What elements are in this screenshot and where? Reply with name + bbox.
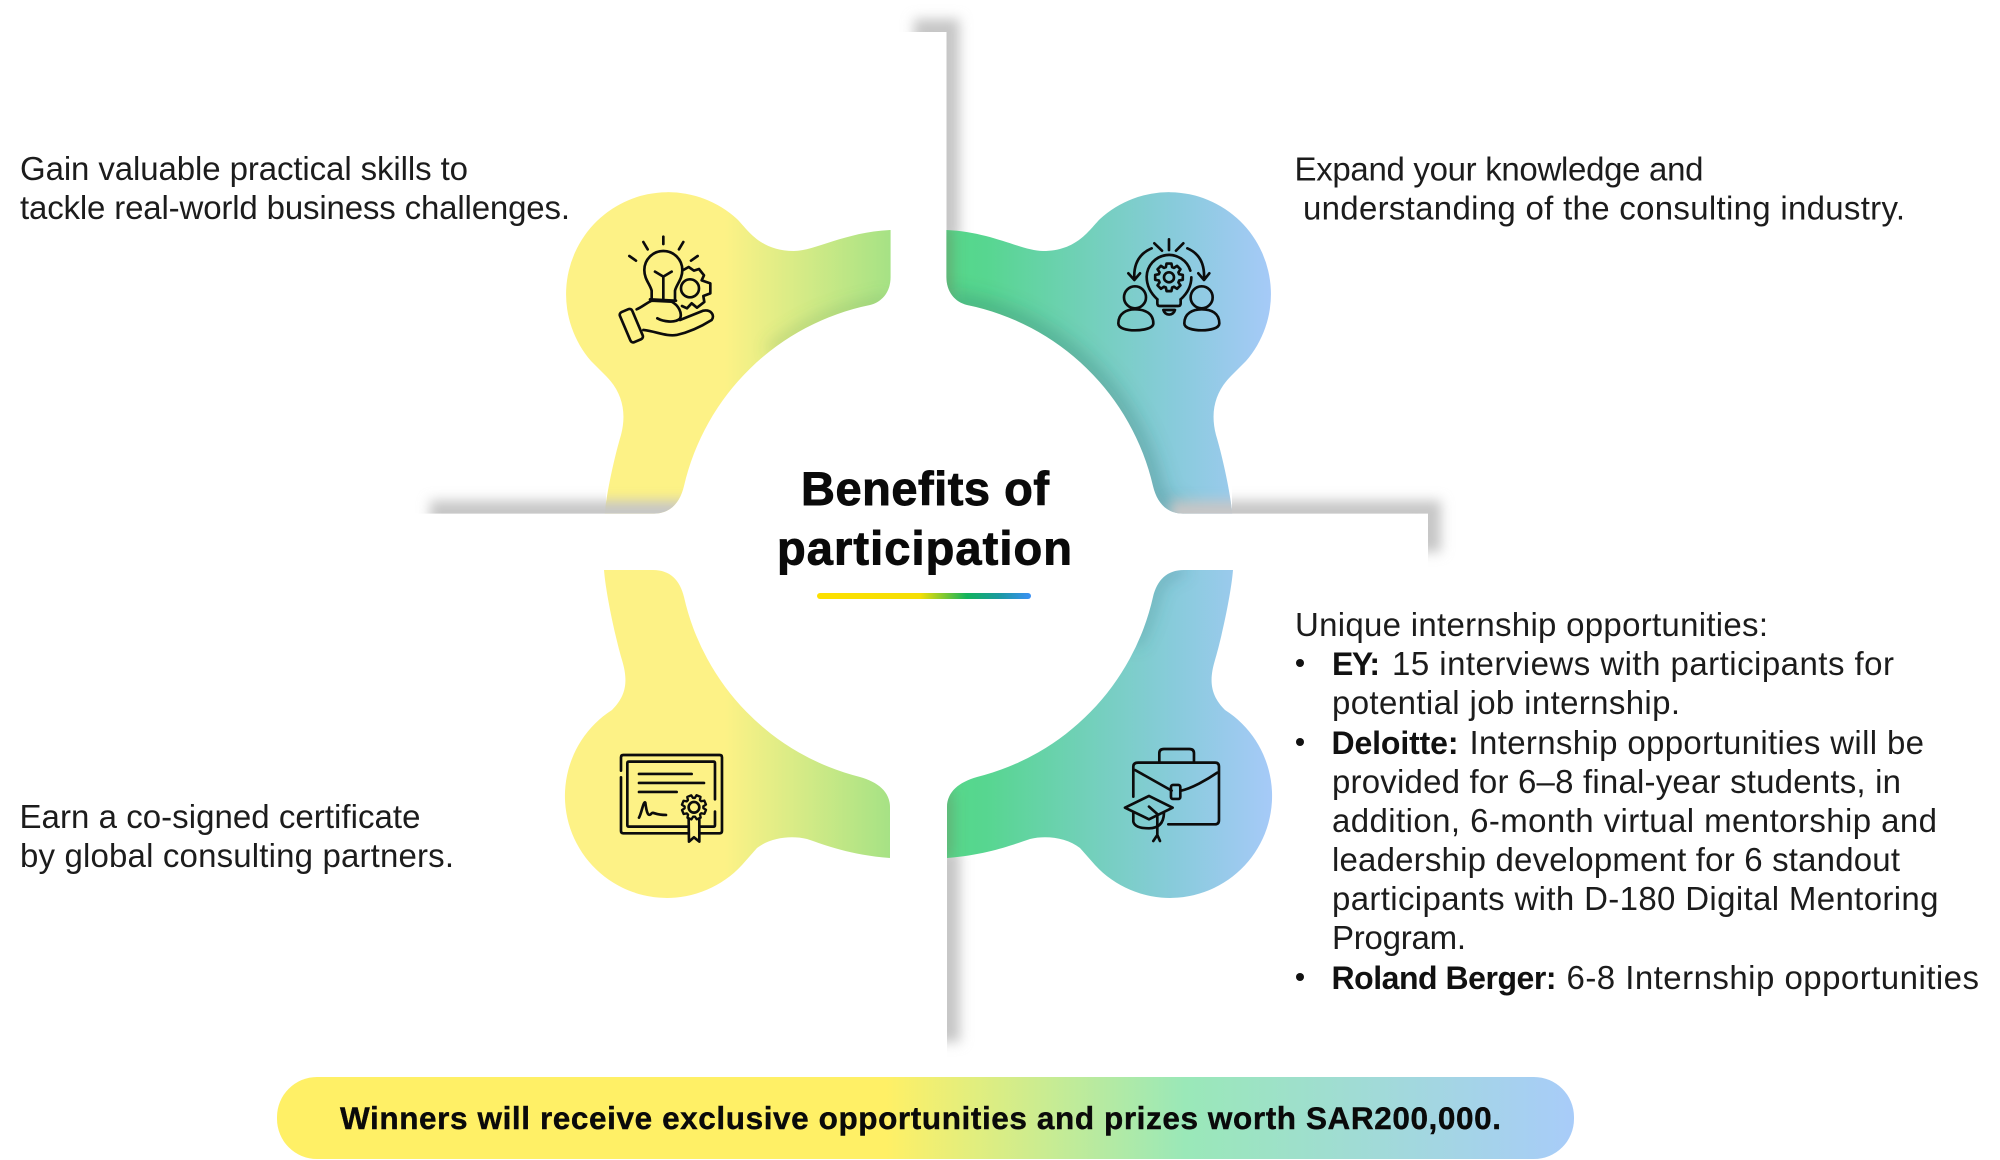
bullet list: EY: — [1332, 646, 1380, 682]
panel: top-right benefit — [944, 150, 1905, 552]
text: internship opportunities — [1295, 606, 1979, 996]
text: certificate — [20, 798, 454, 874]
blob inner shading — [944, 225, 1183, 513]
icon: people sharing an idea bulb — [1118, 239, 1219, 330]
callout: prizes banner — [277, 1077, 1574, 1159]
bullet list: 15 interviews with participants for — [1392, 645, 1894, 682]
text: internship opportunities: Unique internship opportunities: — [1295, 606, 1768, 643]
bullet list: Deloitte: — [1332, 725, 1458, 761]
title underline — [817, 593, 1031, 599]
text: consulting knowledge: Expand your knowledge and — [1294, 150, 1704, 188]
text: certificate: Earn a co-signed certificate — [20, 798, 420, 835]
blob inner shading — [944, 570, 1184, 860]
bullet list: Roland Berger: — [1332, 960, 1556, 996]
title: participation — [777, 522, 1072, 574]
blob: internships — [947, 570, 1272, 898]
blob inner shading — [770, 300, 890, 351]
blob: practical skills — [566, 192, 891, 514]
bullet list: Program. — [1332, 919, 1466, 956]
bullet list: potential job internship. — [1332, 684, 1680, 721]
icon: certificate with rosette — [621, 755, 722, 842]
text: certificate: by global consulting partners. — [20, 837, 454, 874]
text: practical skills: Gain valuable practical skills to — [20, 150, 468, 187]
panel: top-left benefit — [20, 32, 946, 514]
text: practical skills: tackle real-world business challenges. — [20, 189, 570, 226]
panel edge shadow: top corner and vertical divider — [914, 32, 946, 240]
bullet list: participants with D-180 Digital Mentoring — [1332, 880, 1938, 917]
bullet list — [1296, 645, 1979, 996]
bullet list: provided for 6–8 final-year students, in — [1332, 763, 1901, 800]
bullet list: Internship opportunities will be — [1470, 724, 1924, 761]
icon: briefcase with graduation cap — [1125, 749, 1219, 841]
blob: certificate — [565, 570, 890, 898]
callout: prizes banner: Winners will receive exclusive opportunities and prizes worth SAR200,000. — [340, 1100, 1501, 1136]
blob: consulting knowledge — [946, 192, 1271, 514]
text: consulting knowledge: understanding of the consulting industry. — [1303, 190, 1905, 226]
text: practical skills — [20, 150, 570, 226]
title: Benefits of — [801, 462, 1049, 515]
bullet list: addition, 6-month virtual mentorship and — [1332, 802, 1937, 839]
panel edge shadow: right corner — [1170, 514, 1428, 552]
panel edge shadow: bottom — [424, 494, 681, 514]
text: consulting knowledge — [1294, 150, 1905, 226]
title — [777, 462, 1072, 574]
panel: bottom-right benefit — [944, 570, 1979, 1042]
panel: bottom-left benefit — [20, 570, 890, 898]
icon: hand holding light bulb and gear — [619, 237, 713, 343]
bullet list: 6-8 Internship opportunities — [1566, 959, 1979, 996]
bullet list: leadership development for 6 standout — [1332, 841, 1900, 878]
panel edge shadow: lower vertical divider — [947, 856, 966, 1048]
